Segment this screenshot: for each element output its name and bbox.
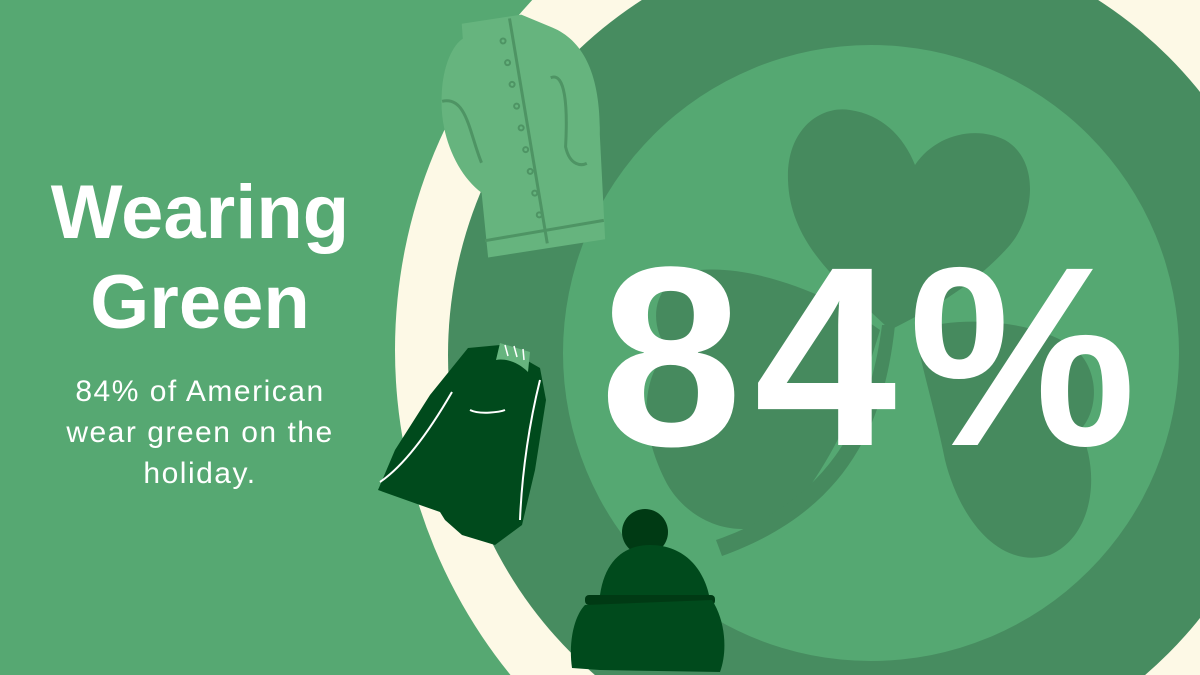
shamrock xyxy=(647,109,1094,558)
cream ring xyxy=(395,0,1200,675)
title: Wearing xyxy=(51,170,349,255)
description: 84% of American xyxy=(75,375,325,408)
description xyxy=(66,375,334,490)
icon: dark green sweater xyxy=(378,343,546,545)
description: wear green on the xyxy=(66,416,334,449)
big percentage: 84% xyxy=(600,214,1148,500)
description: holiday. xyxy=(143,457,257,490)
inner medium circle xyxy=(563,45,1179,661)
title xyxy=(50,170,349,345)
icon: beanie xyxy=(571,509,724,672)
title: Green xyxy=(90,260,310,345)
dark ring xyxy=(448,0,1200,675)
icon: light green jacket xyxy=(436,10,609,260)
